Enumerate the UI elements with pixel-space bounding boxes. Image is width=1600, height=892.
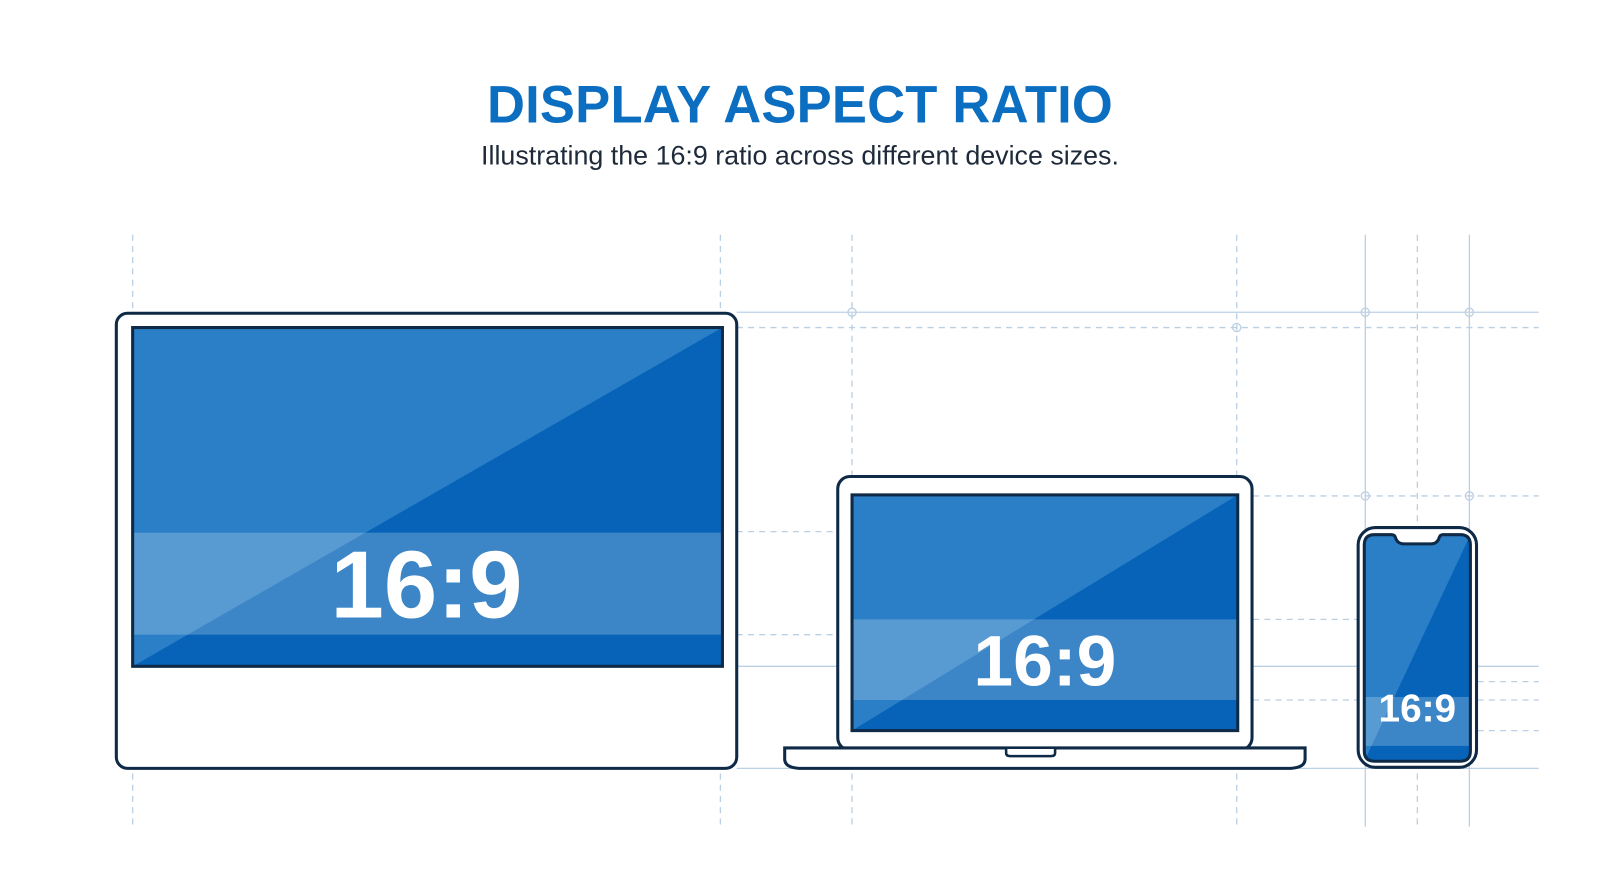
subtitle: Illustrating the 16:9 ratio across different device sizes. [481,140,1119,170]
laptop: 16:9 [973,622,1116,702]
devices illustration [114,234,1539,826]
monitor: 16:9 [331,531,523,638]
phone: 16:9 [1379,687,1456,730]
title: DISPLAY ASPECT RATIO [487,74,1113,134]
laptop [785,477,1305,768]
monitor [116,313,737,768]
phone [1358,528,1477,767]
